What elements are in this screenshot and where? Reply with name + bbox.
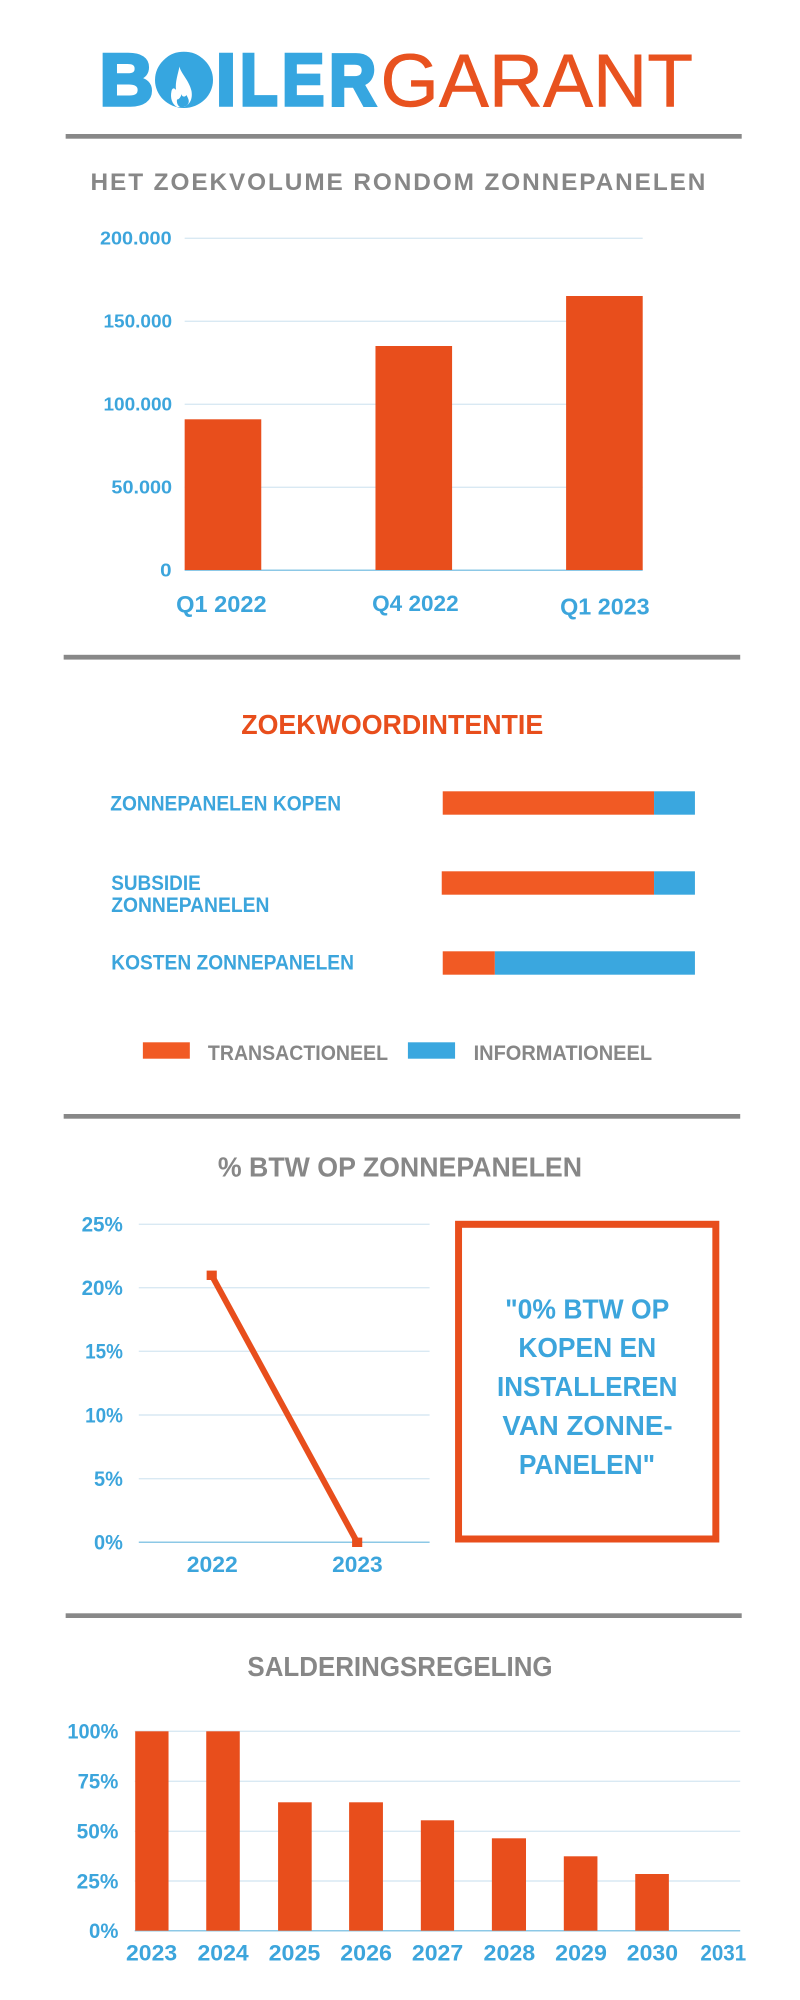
heading: btw: % BTW OP ZONNEPANELEN (218, 1152, 582, 1183)
line chart: btw: 2023 (332, 1552, 383, 1577)
bar chart: salderingsregeling: 2030 (627, 1940, 678, 1966)
bar chart: zoekvolume: 100.000 (103, 393, 172, 415)
callout: 0% btw: PANELEN" (519, 1449, 655, 1480)
bar chart: zoekvolume: 200.000 (100, 227, 172, 249)
callout: 0% btw: VAN ZONNE- (502, 1410, 673, 1441)
bar chart: zoekvolume (100, 227, 650, 620)
bar chart: zoekvolume: Q1 2022 (176, 591, 267, 617)
row: subsidie zonnepanelen: ZONNEPANELEN (111, 894, 269, 917)
logo: Boilergarant: B (99, 39, 154, 121)
line chart: btw: 20% (82, 1276, 123, 1300)
stacked bar chart: zoekwoordintentie (110, 791, 695, 975)
bar chart: salderingsregeling: 2024 (197, 1940, 250, 1966)
bar chart: salderingsregeling (67, 1719, 746, 1966)
legend (143, 1042, 652, 1065)
line chart: btw: 10% (85, 1403, 123, 1428)
bar chart: zoekvolume: 50.000 (111, 476, 172, 498)
logo: Boilergarant: O (157, 40, 211, 121)
logo: Boilergarant: L (240, 40, 278, 121)
bar chart: salderingsregeling: 50% (77, 1819, 118, 1844)
row: subsidie zonnepanelen: SUBSIDIE (111, 872, 201, 895)
bar chart: zoekvolume: 150.000 (103, 310, 172, 332)
line chart: btw: 25% (82, 1212, 123, 1237)
bar chart: salderingsregeling: 2026 (340, 1940, 392, 1966)
callout: 0% btw: KOPEN EN (518, 1332, 656, 1363)
divider 4 (66, 1613, 742, 1618)
bar chart: salderingsregeling: 100% (67, 1719, 118, 1744)
bar chart: salderingsregeling: 2027 (412, 1940, 463, 1966)
bar chart: salderingsregeling: 2028 (484, 1940, 535, 1966)
row: subsidie zonnepanelen (111, 871, 695, 917)
legend: TRANSACTIONEEL (208, 1042, 388, 1065)
bar chart: salderingsregeling: 2023 (126, 1940, 177, 1966)
bar chart: salderingsregeling: 2031 (700, 1940, 746, 1966)
divider 2 (64, 655, 740, 660)
row: zonnepanelen kopen: ZONNEPANELEN KOPEN (110, 793, 341, 816)
callout: 0% btw (459, 1224, 716, 1539)
logo: Boilergarant: I (216, 40, 236, 121)
heading: zoekvolume: HET ZOEKVOLUME RONDOM ZONNEPANELEN (91, 169, 705, 196)
bar chart: salderingsregeling: 25% (77, 1869, 118, 1894)
bar chart: salderingsregeling: 2029 (555, 1940, 607, 1966)
divider 3 (64, 1114, 740, 1119)
heading: salderingsregeling: SALDERINGSREGELING (247, 1651, 553, 1682)
line chart: btw: 2022 (187, 1552, 238, 1577)
callout: 0% btw: "0% BTW OP (505, 1293, 669, 1324)
line chart: btw: 5% (94, 1467, 123, 1491)
bar chart: zoekvolume: 0 (160, 559, 172, 581)
icon: flame in O (155, 52, 213, 108)
callout: 0% btw: INSTALLEREN (497, 1371, 678, 1402)
line chart: btw: 0% (94, 1530, 123, 1555)
logo: Boilergarant: E (282, 39, 325, 121)
row: zonnepanelen kopen (110, 791, 695, 816)
divider 1 (66, 134, 742, 139)
bar chart: salderingsregeling: 75% (78, 1769, 118, 1794)
bar chart: zoekvolume: Q4 2022 (372, 591, 459, 616)
logo: Boilergarant: R (329, 39, 376, 121)
bar chart: salderingsregeling: 0% (89, 1919, 118, 1943)
bar chart: salderingsregeling: 2025 (269, 1940, 320, 1966)
heading: zoekwoordintentie: ZOEKWOORDINTENTIE (241, 709, 543, 740)
row: kosten zonnepanelen: KOSTEN ZONNEPANELEN (111, 951, 354, 974)
line chart: btw: 15% (85, 1339, 123, 1364)
legend: INFORMATIONEEL (474, 1042, 652, 1065)
line chart: btw (82, 1212, 430, 1577)
logo: Boilergarant (99, 38, 693, 122)
bar chart: zoekvolume: Q1 2023 (560, 593, 650, 620)
logo: Boilergarant: GARANT (380, 38, 693, 122)
row: kosten zonnepanelen (111, 951, 695, 975)
